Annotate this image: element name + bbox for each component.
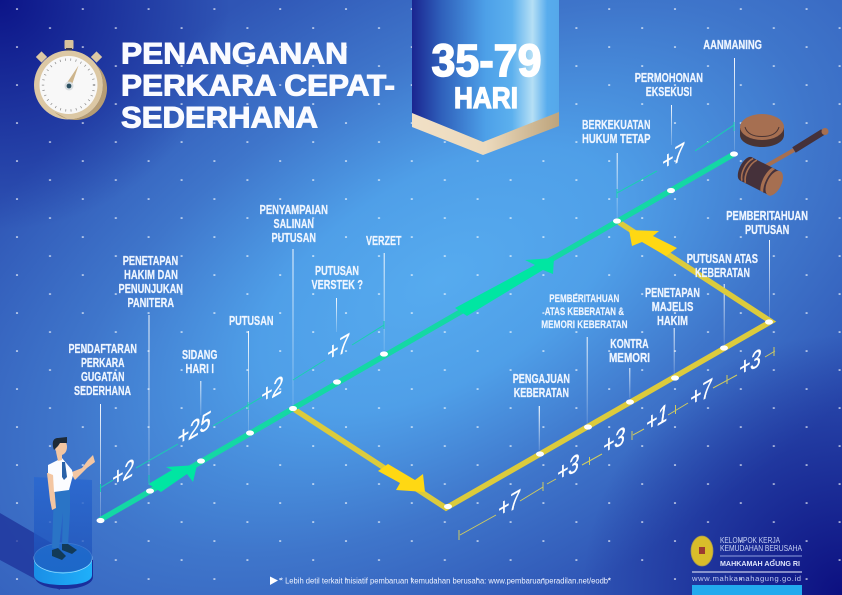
day counts: +7 — [662, 136, 685, 177]
label: penyampaian: SALINAN — [274, 216, 314, 231]
day counts: +3 — [739, 343, 761, 383]
label: berkekuatan: BERKEKUATAN — [582, 117, 650, 132]
vertical leader lines — [100, 58, 770, 520]
label: pendaftaran: PERKARA — [81, 355, 124, 370]
banner: duration — [412, 0, 559, 155]
label: verstek: PUTUSAN — [315, 263, 359, 278]
icon: stopwatch — [34, 40, 107, 120]
green path: main route — [100, 154, 734, 520]
logo block: mahkamah agung: KEMUDAHAN BERUSAHA — [720, 543, 802, 553]
yellow day ruler — [459, 347, 775, 540]
label: aanmaning: AANMANING — [703, 37, 762, 52]
logo block: mahkamah agung: KELOMPOK KERJA — [720, 535, 780, 545]
label: pendaftaran: GUGATAN — [81, 369, 124, 384]
label: pendaftaran: PENDAFTARAN — [68, 341, 137, 356]
green day ruler — [100, 122, 734, 492]
label: putusan atas keberatan: PUTUSAN ATAS — [687, 251, 758, 266]
timeline nodes — [96, 151, 773, 523]
day counts: +7 — [327, 327, 350, 368]
day counts: +3 — [603, 421, 625, 461]
label: kontra memori: KONTRA — [610, 336, 649, 351]
day counts: +2 — [261, 370, 283, 410]
label: pengajuan keberatan: KEBERATAN — [514, 385, 569, 400]
icon: sound block — [740, 114, 784, 147]
title — [121, 38, 395, 134]
label: penetapan majelis — [645, 285, 700, 328]
pedestal — [34, 543, 93, 589]
logo block: mahkamah agung: www.mahkamahagung.go.id — [691, 574, 801, 583]
footnote: * Lebih detil terkait inisiatif pembaruan kemudahan berusaha: www.pembaruanperadilan.net/eodb* — [280, 576, 611, 586]
label: pemberitahuan putusan — [726, 208, 808, 237]
day counts: +3 — [557, 448, 579, 488]
label: berkekuatan: HUKUM TETAP — [582, 131, 651, 146]
label: putusan atas keberatan — [687, 251, 758, 280]
label: penetapan majelis: MAJELIS — [652, 299, 694, 314]
day counts: +7 — [690, 372, 713, 413]
banner: duration: HARI — [454, 82, 518, 115]
label: sidang — [182, 347, 218, 376]
label: verzet: VERZET — [366, 233, 402, 248]
label: penetapan hakim: HAKIM DAN — [124, 267, 178, 282]
label: permohonan: EKSEKUSI — [646, 84, 692, 99]
label: putusan atas keberatan: KEBERATAN — [695, 265, 750, 280]
label: pemberitahuan memori — [541, 293, 628, 331]
label: penetapan hakim — [118, 253, 183, 310]
label: putusan: PUTUSAN — [229, 313, 274, 328]
label: berkekuatan — [582, 117, 651, 146]
label: penyampaian: PUTUSAN — [272, 230, 316, 245]
day counts — [112, 136, 761, 524]
label: penyampaian: PENYAMPAIAN — [260, 202, 328, 217]
logo block: mahkamah agung — [691, 535, 802, 595]
title: SEDERHANA — [121, 102, 318, 134]
label: pemberitahuan putusan: PUTUSAN — [745, 222, 789, 237]
label: pendaftaran: SEDERHANA — [74, 383, 131, 398]
title: PERKARA CEPAT- — [121, 70, 395, 102]
label: pengajuan keberatan: PENGAJUAN — [513, 371, 570, 386]
figure: person on pedestal — [34, 437, 95, 589]
label: penetapan hakim: PANITERA — [128, 295, 174, 310]
label: penetapan majelis: HAKIM — [657, 313, 688, 328]
logo block: mahkamah agung: MAHKAMAH AGUNG RI — [720, 561, 800, 568]
label: permohonan: PERMOHONAN — [635, 70, 703, 85]
person — [47, 437, 95, 560]
label: verstek: VERSTEK ? — [312, 277, 363, 292]
label: pemberitahuan putusan: PEMBERITAHUAN — [726, 208, 808, 223]
label: sidang: SIDANG — [182, 347, 218, 362]
emblem — [691, 536, 713, 566]
label: pemberitahuan memori: ATAS KEBERATAN & — [545, 306, 624, 318]
label: kontra memori: MEMORI — [609, 350, 650, 365]
day counts: +2 — [112, 453, 134, 493]
glass panel — [34, 477, 92, 572]
label: penetapan hakim: PENETAPAN — [123, 253, 178, 268]
label: kontra memori — [609, 336, 650, 365]
label: penetapan majelis: PENETAPAN — [645, 285, 700, 300]
label: penetapan hakim: PENUNJUKAN — [118, 281, 183, 296]
icon: gavel — [734, 128, 828, 198]
label: pendaftaran — [68, 341, 137, 398]
arrow: green large — [455, 258, 554, 316]
day counts: +7 — [498, 483, 521, 524]
arrow: yellow down — [378, 464, 425, 492]
title: PENANGANAN — [121, 38, 348, 70]
banner: duration: 35-79 — [432, 35, 542, 86]
day counts: +25 — [177, 405, 212, 452]
label: sidang: HARI I — [186, 361, 214, 376]
label: penyampaian — [260, 202, 328, 245]
arrow: green small — [148, 465, 197, 492]
day counts: +1 — [646, 398, 668, 438]
label: permohonan — [635, 70, 703, 99]
yellow path: appeal route — [293, 221, 771, 508]
label: pemberitahuan memori: PEMBERITAHUAN — [549, 293, 619, 305]
label: pemberitahuan memori: MEMORI KEBERATAN — [541, 319, 628, 331]
label: verstek — [312, 263, 363, 292]
label: pengajuan keberatan — [513, 371, 570, 400]
arrow: yellow up — [629, 230, 677, 256]
